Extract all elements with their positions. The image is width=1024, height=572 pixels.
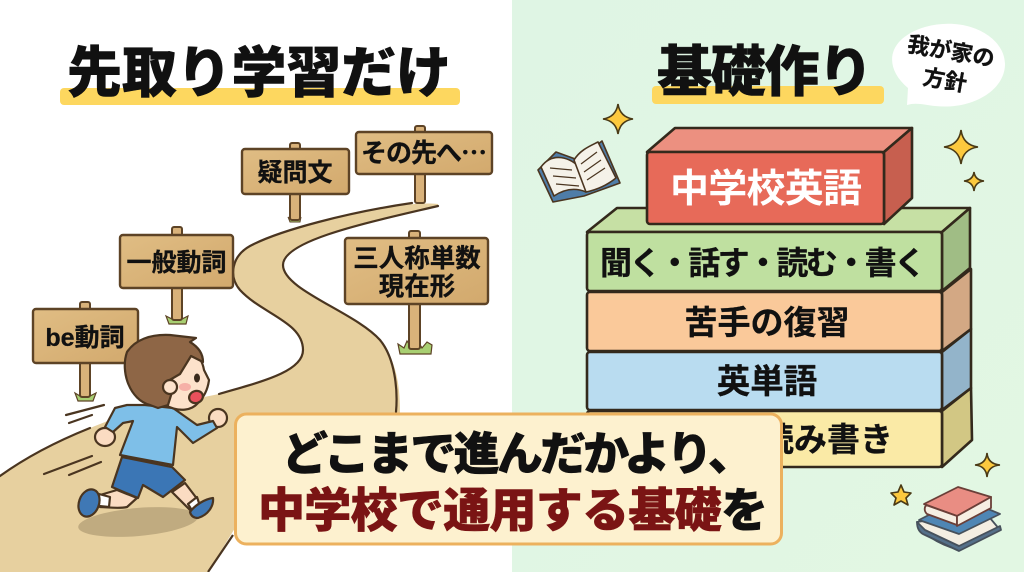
hair	[125, 335, 203, 408]
block: 聞く・話す・読む・書く green: 聞く・話す・読む・書く	[600, 245, 926, 281]
block: 英単語 blue: 英単語	[717, 364, 817, 401]
signpost: その先へ…: その先へ…	[361, 133, 487, 170]
panel: right background	[512, 0, 1024, 572]
ground shadow	[77, 503, 199, 541]
signpost: その先へ…	[356, 126, 492, 203]
icon: sparkle	[975, 453, 1000, 477]
heading: left: 先取り学習だけ	[67, 42, 451, 104]
signpost: be動詞: be動詞	[45, 324, 125, 352]
block: 中学校英語 red: 中学校英語	[670, 168, 862, 211]
mouth	[187, 389, 205, 405]
icon: open book	[538, 141, 620, 202]
block: 中学校英語 red	[647, 128, 912, 224]
signpost: 疑問文: 疑問文	[257, 159, 333, 187]
block: 基礎 yellow: 読み書き	[761, 421, 893, 458]
speech bubble: 我が家の	[906, 32, 997, 71]
eye	[194, 374, 200, 382]
speech bubble: 方針	[921, 64, 969, 97]
signpost: 疑問文	[242, 143, 349, 222]
face	[165, 352, 209, 410]
cheek	[179, 383, 191, 391]
signpost: 一般動詞: 一般動詞	[126, 249, 227, 277]
signpost: 三人称単数現在形: 三人称単数	[353, 245, 481, 273]
right fist	[209, 409, 227, 427]
icon: stacked books	[917, 487, 1001, 551]
signpost: 三人称単数現在形	[345, 231, 488, 354]
callout banner: どこまで進んだかより、	[282, 428, 754, 480]
motion lines	[44, 405, 104, 475]
front leg	[172, 483, 198, 510]
block: 基礎 yellow	[587, 388, 972, 467]
ear	[163, 380, 177, 394]
shorts	[112, 457, 185, 498]
block: 苦手の復習 orange	[587, 269, 971, 351]
signpost: 一般動詞	[120, 227, 233, 324]
signpost: 三人称単数現在形: 現在形	[379, 273, 455, 301]
heading: right: 基礎作り	[657, 41, 873, 103]
winding road	[0, 203, 438, 572]
icon: sparkle	[964, 172, 984, 191]
running boy	[44, 335, 227, 541]
shirt	[105, 405, 217, 465]
block stack	[587, 128, 972, 467]
block: 苦手の復習 orange: 苦手の復習	[684, 304, 850, 341]
callout banner: 中学校で通用する基礎を	[258, 484, 768, 537]
icon: sparkle	[944, 130, 978, 164]
back leg	[100, 490, 137, 508]
panel: left background	[0, 0, 512, 572]
signpost: be動詞	[33, 302, 138, 401]
block: 英単語 blue	[587, 329, 971, 410]
icon: sparkle	[603, 104, 633, 134]
speech bubble	[892, 24, 1005, 107]
left fist	[95, 428, 115, 446]
icon: star	[891, 485, 911, 505]
callout banner	[236, 414, 782, 544]
block: 聞く・話す・読む・書く green	[587, 208, 970, 291]
